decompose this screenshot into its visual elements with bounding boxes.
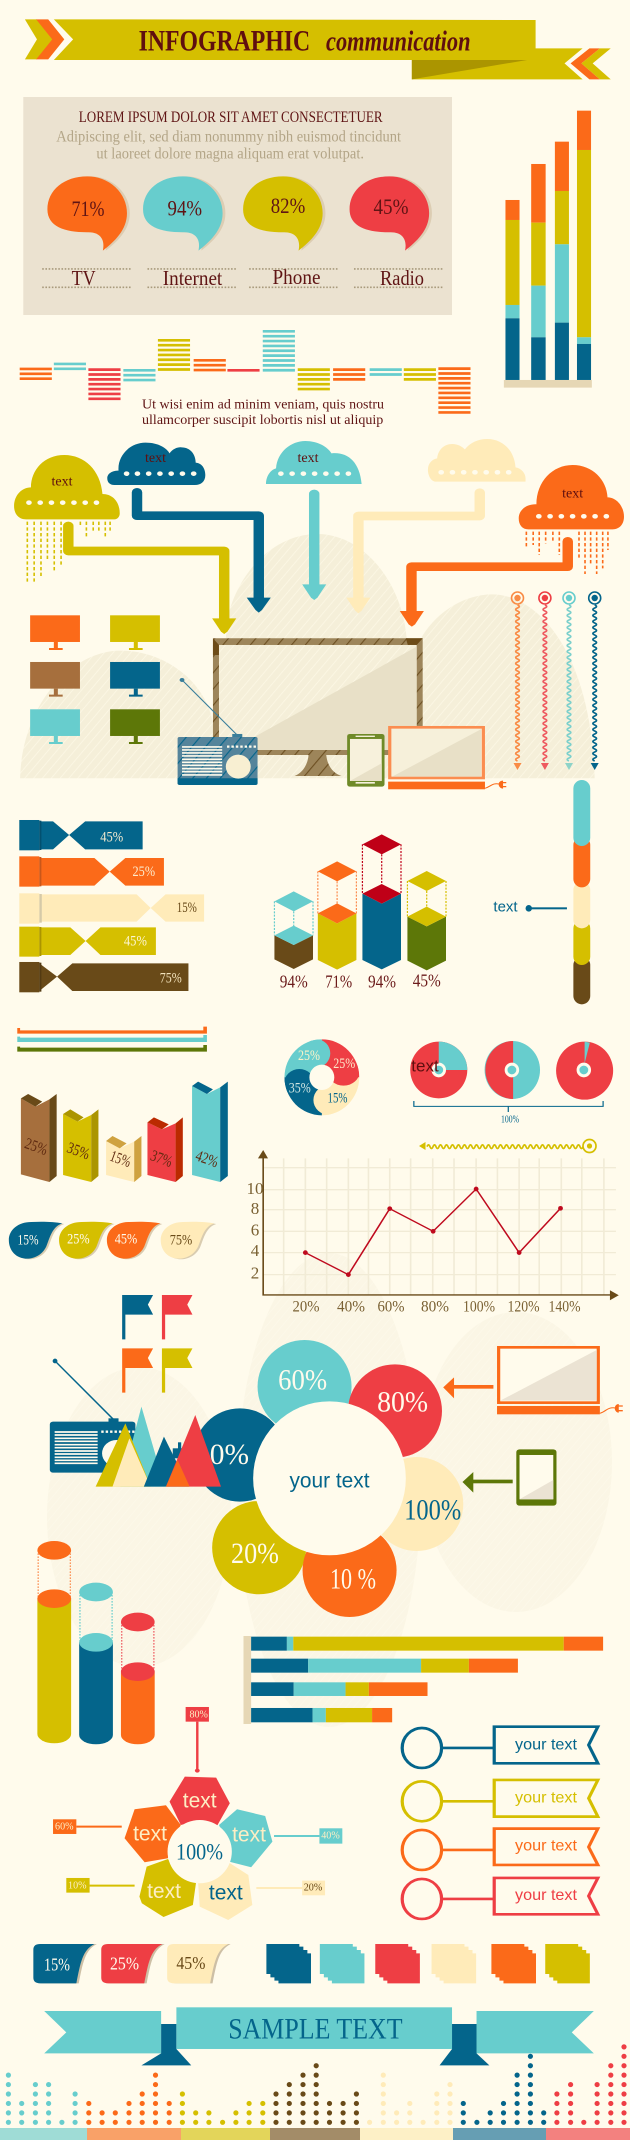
flower percentages xyxy=(195,1363,461,1595)
bow-tie labels: 15% xyxy=(177,900,197,916)
panel body text: ut laoreet dolore magna aliquam erat volutpat. xyxy=(96,145,364,162)
bow-tie labels: 45% xyxy=(100,830,123,846)
speech bubbles xyxy=(42,176,443,287)
phone xyxy=(347,734,385,787)
bow-tie percentage bars xyxy=(19,820,204,992)
radio with mountains xyxy=(50,1359,221,1487)
bow-tie labels: 25% xyxy=(133,864,155,880)
callout labels: your text xyxy=(515,1790,578,1807)
bubble labels: TV xyxy=(72,266,96,290)
ribbon bar labels: 25% xyxy=(22,1135,50,1159)
laptop xyxy=(388,727,506,789)
y axis labels: 4 xyxy=(251,1241,260,1260)
x axis labels: 20% xyxy=(292,1299,320,1316)
swirl donut chart xyxy=(284,1039,360,1116)
panel body text xyxy=(56,129,401,162)
isometric column chart xyxy=(274,834,446,992)
wavy signal arrows xyxy=(512,592,601,770)
phone with olive arrow xyxy=(462,1449,556,1506)
column labels: 71% xyxy=(325,972,352,992)
flower percentages: 10 % xyxy=(330,1562,376,1595)
donut labels: 15% xyxy=(328,1091,348,1107)
x axis labels xyxy=(292,1299,580,1316)
panel heading: LOREM IPSUM DOLOR SIT AMET CONSECTETUER xyxy=(79,109,383,126)
ribbon text: SAMPLE TEXT xyxy=(228,2013,403,2046)
ribbon bar labels: 15% xyxy=(108,1148,133,1171)
curled tag labels: 25% xyxy=(110,1954,139,1974)
flower centre label: your text xyxy=(290,1469,370,1492)
arrows from clouds xyxy=(68,492,568,634)
pie chart trio xyxy=(410,1041,613,1125)
wave: teal xyxy=(563,592,575,770)
ribbon bar labels: 37% xyxy=(148,1147,175,1171)
3d ribbon bar chart xyxy=(21,1082,228,1182)
cloud labels: text xyxy=(562,487,583,502)
hexagon tag values: 10% xyxy=(68,1880,87,1892)
striped equalizer chart xyxy=(36,330,454,414)
x axis labels: 40% xyxy=(337,1299,365,1316)
x axis labels: 60% xyxy=(378,1299,404,1316)
ribbon bar labels xyxy=(22,1135,221,1171)
hexagon labels: text xyxy=(133,1823,167,1846)
panel body text: Adipiscing elit, sed diam nonummy nibh euismod tincidunt xyxy=(56,129,401,146)
horizontal stacked bars xyxy=(243,1636,603,1724)
flower percentage diagram xyxy=(194,1340,463,1617)
caption text: ullamcorper suscipit lobortis nisl ut aliquip xyxy=(142,413,383,428)
flower percentages: 80% xyxy=(377,1385,428,1418)
x axis labels: 80% xyxy=(421,1299,449,1316)
bubble labels: Radio xyxy=(380,266,424,290)
hexagon labels: text xyxy=(183,1789,217,1812)
hexagon centre value: 100% xyxy=(176,1839,223,1864)
curled tag labels xyxy=(44,1953,205,1975)
pill label: text xyxy=(493,899,518,916)
flower percentages: 10% xyxy=(195,1438,249,1471)
hexagon labels xyxy=(133,1789,266,1904)
teardrop labels: 25% xyxy=(67,1231,90,1247)
cloud labels: text xyxy=(52,475,73,490)
hexagon tag values: 60% xyxy=(55,1820,74,1832)
header banner xyxy=(25,19,611,79)
bubble percentages: 45% xyxy=(374,194,408,219)
cloud: teal xyxy=(266,441,362,484)
column labels: 94% xyxy=(280,972,308,992)
column labels: 94% xyxy=(368,972,396,992)
stepped corner swatches xyxy=(266,1944,590,1983)
cloud: cream xyxy=(428,439,526,482)
flower percentages: 100% xyxy=(404,1493,461,1526)
donut labels: 25% xyxy=(333,1056,355,1072)
triple rail lines xyxy=(17,1027,207,1052)
donut labels: 25% xyxy=(298,1048,320,1064)
small monitors grid xyxy=(30,615,160,744)
callout labels: your text xyxy=(515,1838,578,1855)
cloud labels: text xyxy=(145,451,166,466)
group: cloud to device flow xyxy=(14,439,624,634)
donut labels: 35% xyxy=(289,1081,311,1097)
pie text: text xyxy=(411,1057,439,1076)
teardrop labels: 45% xyxy=(115,1231,137,1247)
teardrop labels: 15% xyxy=(18,1232,38,1248)
flags xyxy=(122,1295,192,1393)
teardrop percentage tags xyxy=(9,1222,216,1259)
y axis labels: 8 xyxy=(251,1199,259,1218)
x axis labels: 100% xyxy=(463,1299,495,1316)
bubble labels: Internet xyxy=(163,266,222,290)
hexagon labels: text xyxy=(232,1824,266,1847)
subtitle: communication xyxy=(326,26,471,58)
x axis labels: 140% xyxy=(548,1299,580,1316)
bottom colour strip xyxy=(0,2128,630,2140)
monitor xyxy=(213,638,423,776)
y axis labels: 10 xyxy=(246,1179,264,1198)
dot column equalizer xyxy=(8,2047,624,2122)
bow-tie labels: 75% xyxy=(160,971,182,987)
column labels xyxy=(280,971,441,992)
hatched background domes xyxy=(20,534,595,778)
caption text xyxy=(142,397,384,428)
hexagon labels: text xyxy=(209,1881,243,1904)
bubble percentages: 71% xyxy=(72,196,104,221)
laptop with orange arrow xyxy=(443,1347,623,1414)
stacked vertical bar chart xyxy=(504,111,592,388)
ribbon bar labels: 42% xyxy=(193,1148,221,1171)
cloud: yellow xyxy=(14,455,120,584)
hexagon tag values: 40% xyxy=(321,1830,340,1842)
radio xyxy=(178,678,258,785)
x axis labels: 120% xyxy=(508,1299,540,1316)
cloud labels xyxy=(52,451,583,502)
wave: navy xyxy=(589,592,601,770)
sample text ribbon xyxy=(44,2007,594,2065)
hexagon tag values: 80% xyxy=(189,1709,208,1721)
teardrop labels xyxy=(18,1231,192,1248)
y axis labels: 6 xyxy=(251,1221,259,1240)
wave: orange xyxy=(512,592,524,770)
bubble percentages: 94% xyxy=(168,196,202,220)
flower percentages: 20% xyxy=(231,1537,279,1570)
bubble percentages: 82% xyxy=(271,193,305,218)
callout labels: your text xyxy=(515,1736,578,1753)
curled tag labels: 15% xyxy=(44,1955,70,1975)
hexagon tag values xyxy=(55,1709,340,1894)
column labels: 45% xyxy=(413,971,441,991)
pie total: 100% xyxy=(501,1114,519,1125)
line chart xyxy=(246,1150,619,1316)
callout labels xyxy=(515,1736,578,1904)
ribbon bar labels: 35% xyxy=(65,1140,92,1163)
hexagon tag values: 20% xyxy=(304,1882,322,1894)
cloud: orange xyxy=(519,465,624,574)
caption text: Ut wisi enim ad minim veniam, quis nostru xyxy=(142,397,384,412)
your text callouts xyxy=(402,1727,598,1919)
cloud: navy xyxy=(107,443,205,485)
bubble labels xyxy=(72,265,424,290)
curled percentage tags xyxy=(33,1944,231,1983)
bubble labels: Phone xyxy=(272,265,320,289)
y axis labels: 2 xyxy=(251,1264,259,1283)
vertical multicolour pill xyxy=(493,780,590,1004)
hexagon labels: text xyxy=(147,1880,181,1903)
donut labels xyxy=(289,1048,355,1107)
title: INFOGRAPHIC xyxy=(139,25,310,58)
y axis labels xyxy=(246,1179,264,1283)
bow-tie labels xyxy=(100,830,197,987)
panel: media usage speech bubbles xyxy=(23,97,452,315)
bubble percentages xyxy=(72,193,408,221)
hexagon flower diagram xyxy=(53,1707,342,1920)
cylinder chart xyxy=(37,1541,155,1744)
curled tag labels: 45% xyxy=(176,1953,205,1973)
flower percentages: 60% xyxy=(278,1363,327,1396)
callout labels: your text xyxy=(515,1887,578,1904)
yellow wavy arrow xyxy=(419,1140,596,1152)
cloud labels: text xyxy=(298,451,319,466)
wave: red xyxy=(539,592,551,770)
faint background ovals xyxy=(47,1253,612,1727)
teardrop labels: 75% xyxy=(170,1232,192,1248)
bow-tie labels: 45% xyxy=(124,934,147,950)
